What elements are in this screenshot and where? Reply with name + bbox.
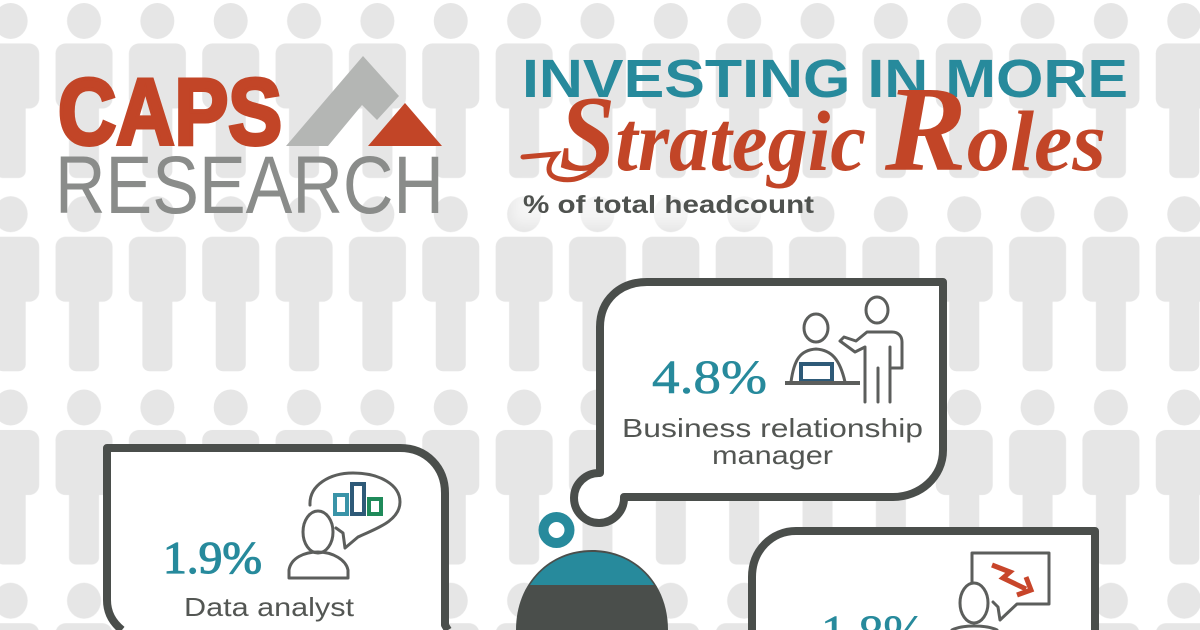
panel: business relationship manager — [574, 282, 943, 523]
label: Data analyst — [184, 592, 355, 622]
speech bubble outline — [107, 448, 448, 630]
logo wordmark: RESEARCH: RESEARCH — [55, 140, 444, 231]
logo mark: grey roof — [286, 56, 399, 146]
logo: CAPS Research — [55, 56, 444, 231]
title block — [522, 49, 1128, 219]
icon: two people at a desk — [785, 297, 902, 402]
panel: third role, cropped by frame — [752, 531, 1095, 630]
speech bubble outline — [574, 282, 943, 523]
value: 1.9% — [163, 532, 262, 583]
value: 4.8% — [652, 351, 767, 404]
label line two: manager — [712, 440, 833, 470]
label: Business relationship — [622, 413, 923, 443]
title: Investing in more: INVESTING IN MORE — [522, 49, 1128, 109]
speech bubble outline — [752, 531, 1095, 630]
central person head — [516, 550, 668, 630]
logo wordmark: CAPS: CAPS — [58, 59, 282, 164]
logo mark: red triangle — [368, 103, 442, 146]
title swash — [523, 154, 596, 180]
title: Strategic: Strategic — [559, 75, 866, 194]
subtitle: % of total headcount — [523, 191, 815, 219]
ring above head — [544, 517, 570, 543]
panel: data analyst — [107, 448, 448, 630]
icon: person with falling chart — [952, 553, 1049, 630]
title: Roles: Roles — [884, 62, 1106, 197]
icon: person with bar chart thought — [289, 473, 400, 578]
